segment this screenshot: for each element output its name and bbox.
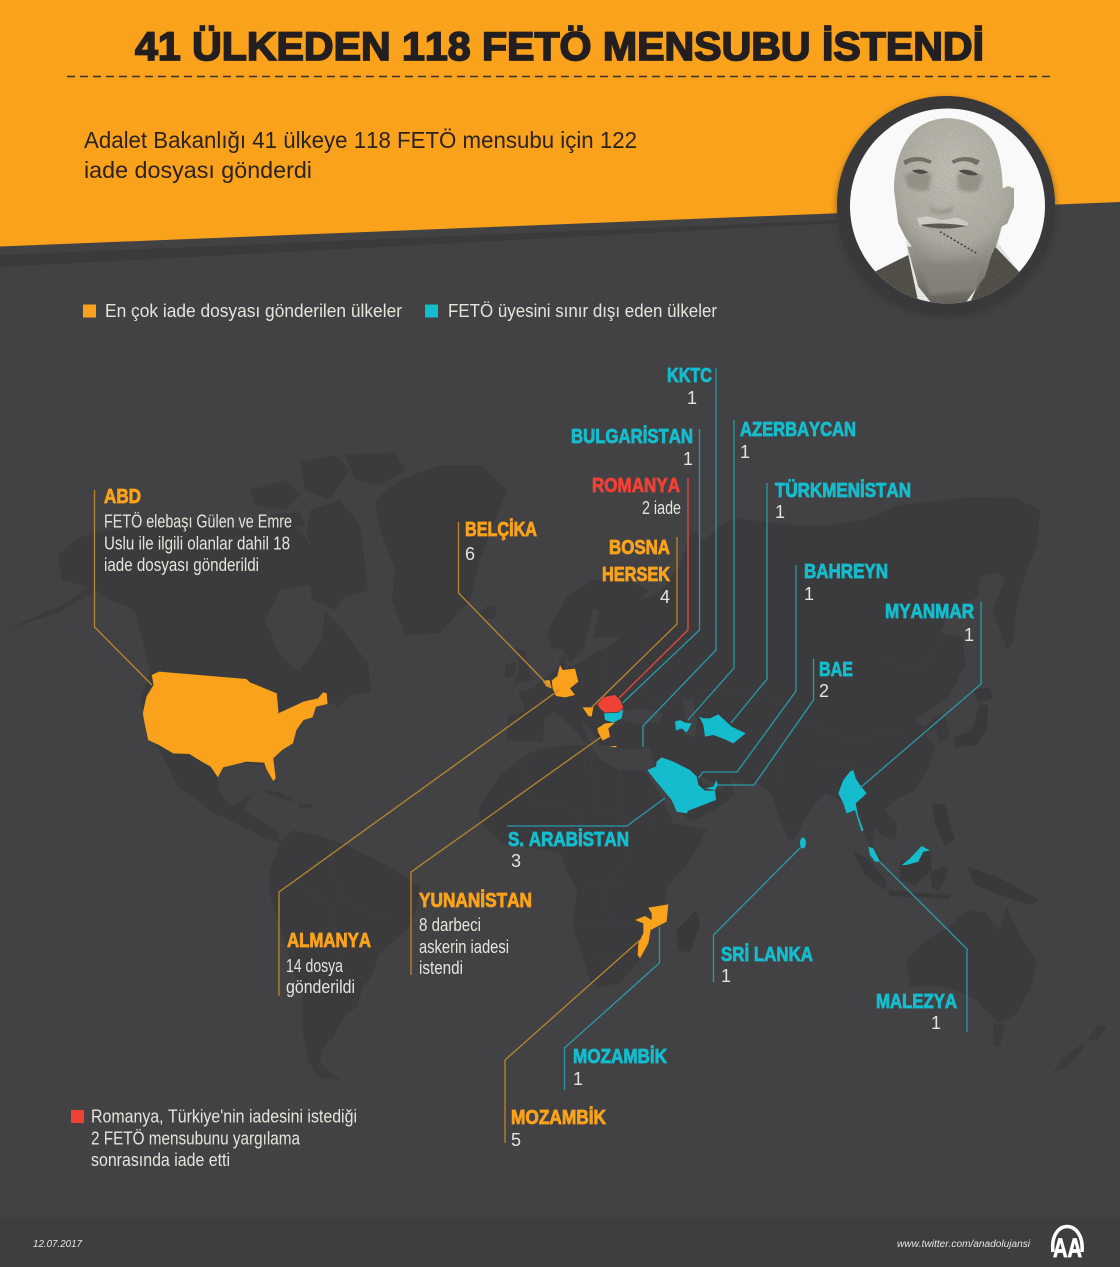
highlighted country: UAE — [705, 780, 718, 790]
body: gönderildi — [286, 977, 355, 997]
value: 6 — [465, 544, 475, 564]
legend swatch: teal — [425, 304, 438, 318]
highlighted country: Saudi Arabia — [647, 757, 716, 813]
callout: Bosna Hersek — [592, 536, 677, 707]
callout: Almanya — [279, 690, 559, 997]
face grain — [876, 118, 1019, 303]
land: eurasia — [507, 497, 1040, 862]
heading: AZERBAYCAN — [740, 418, 856, 441]
subtitle: Adalet Bakanlığı 41 ülkeye 118 FETÖ mensubu için 122 — [84, 127, 637, 153]
portrait backdrop — [850, 108, 1045, 304]
land: iceland and british isles — [480, 605, 532, 684]
value: 2 — [819, 681, 829, 701]
leader line — [731, 483, 767, 723]
note text: 2 FETÖ mensubunu yargılama — [91, 1128, 301, 1148]
land: japan — [953, 687, 993, 748]
leader line — [714, 847, 801, 982]
callout: Myanmar — [860, 600, 981, 788]
body: 14 dosya — [286, 956, 344, 976]
portrait ring — [837, 96, 1055, 314]
highlighted country: Greece — [597, 723, 617, 747]
highlighted country: Turkmenistan — [699, 714, 746, 743]
land: australia — [907, 907, 1037, 1023]
callout: S. Arabistan — [507, 798, 665, 871]
heading: MYANMAR — [885, 600, 974, 623]
footer url: www.twitter.com/anadolujansi — [897, 1239, 1031, 1250]
land: southeast asia islands — [852, 803, 1040, 905]
portrait — [836, 96, 1056, 318]
value: 1 — [721, 966, 731, 986]
land: africa — [479, 745, 707, 988]
note swatch — [71, 1110, 84, 1123]
highlighted country: Romania — [597, 695, 623, 713]
value: 1 — [931, 1013, 941, 1033]
leader line — [688, 420, 734, 720]
body: 8 darbeci — [419, 915, 481, 935]
legend label: orange: En çok iade dosyası gönderilen ülkeler — [105, 301, 402, 321]
note: Romania — [71, 1106, 357, 1170]
value: 5 — [511, 1130, 521, 1150]
leader line — [564, 927, 660, 1090]
callout: Belçika — [458, 518, 550, 687]
value: 1 — [964, 625, 974, 645]
value: 1 — [573, 1069, 583, 1089]
land: north america — [5, 520, 371, 842]
highlighted country: Sri Lanka — [800, 838, 806, 848]
heading: BULGARİSTAN — [571, 425, 693, 448]
heading: MALEZYA — [876, 990, 957, 1013]
callout: Romanya — [592, 474, 688, 698]
portrait shadow — [836, 98, 1056, 318]
value: 4 — [660, 587, 670, 607]
leader line — [643, 368, 716, 747]
world map — [5, 452, 1107, 1080]
subtitle: iade dosyası gönderdi — [84, 157, 312, 183]
callout: Mozambik orange — [505, 940, 640, 1150]
highlighted country: Mozambique — [635, 904, 668, 958]
highlighted country: Myanmar — [838, 770, 867, 832]
leader line — [880, 862, 967, 1032]
heading: MOZAMBİK — [573, 1045, 667, 1068]
heading: ROMANYA — [592, 474, 680, 497]
land: madagascar — [677, 910, 700, 953]
body: Uslu ile ilgili olanlar dahil 18 — [104, 534, 290, 554]
heading: ABD — [104, 485, 141, 508]
AA logo — [1053, 1226, 1082, 1263]
land: south america — [270, 830, 420, 1080]
footer bar — [0, 1218, 1120, 1267]
highlighted country: Belgium — [543, 680, 552, 688]
water: inland seas — [623, 698, 725, 790]
leader line — [622, 429, 700, 703]
leader line — [860, 602, 981, 788]
body: FETÖ elebaşı Gülen ve Emre — [104, 512, 292, 532]
leader line — [411, 737, 601, 975]
land: canadian arctic islands — [250, 452, 405, 597]
heading: S. ARABİSTAN — [508, 828, 629, 851]
land: tasmania and new zealand — [993, 1023, 1107, 1073]
legend swatch: orange — [83, 304, 96, 318]
highlighted country: Azerbaijan — [675, 720, 692, 733]
callout: ABD — [94, 485, 292, 685]
callout: BAE — [717, 658, 853, 785]
portrait face — [875, 118, 1019, 304]
note text: sonrasında iade etti — [91, 1150, 230, 1170]
heading: SRİ LANKA — [721, 943, 813, 966]
highlighted country: Germany — [552, 665, 578, 697]
value: 1 — [804, 584, 814, 604]
title: 41 ÜLKEDEN 118 FETÖ MENSUBU İSTENDİ — [135, 24, 984, 69]
note text: Romanya, Türkiye'nin iadesini istediği — [91, 1106, 357, 1126]
leader line — [94, 490, 152, 685]
callout: Türkmenistan — [731, 479, 911, 723]
orange header band — [0, 0, 1120, 246]
land: greenland — [375, 465, 507, 635]
highlighted country: Bulgaria — [604, 709, 623, 723]
heading: BAE — [819, 658, 853, 681]
value: 1 — [687, 388, 697, 408]
leader line — [592, 537, 677, 707]
body: istendi — [419, 958, 463, 978]
heading: TÜRKMENİSTAN — [775, 479, 911, 502]
callout: Sri Lanka — [714, 847, 813, 986]
callout: Malezya — [876, 862, 967, 1033]
logo arc — [1053, 1226, 1082, 1252]
faint country borders — [290, 640, 945, 990]
footer date: 12.07.2017 — [33, 1239, 82, 1250]
body: askerin iadesi — [419, 937, 509, 957]
callout: Bahreyn — [698, 560, 888, 778]
land: cuba and caribbean — [261, 790, 312, 809]
callout: KKTC — [643, 364, 716, 747]
header shadow wedge — [0, 220, 840, 267]
leader line — [279, 690, 559, 996]
callout: Azerbaycan — [688, 418, 856, 720]
value: 2 iade — [642, 498, 681, 518]
value: 3 — [511, 851, 521, 871]
heading: BELÇİKA — [465, 518, 537, 541]
legend — [83, 301, 717, 321]
legend label: teal: FETÖ üyesini sınır dışı eden ülkeler — [448, 301, 717, 321]
highlighted country: Malaysia — [868, 846, 930, 865]
leader line — [458, 522, 550, 687]
callout: Bulgaristan — [571, 425, 700, 703]
heading: ALMANYA — [287, 929, 371, 952]
leader line — [698, 565, 796, 778]
body: iade dosyası gönderildi — [104, 555, 259, 575]
value: 1 — [683, 449, 693, 469]
leader line — [619, 478, 688, 698]
logo letters: AA — [1053, 1233, 1082, 1263]
value: 1 — [740, 442, 750, 462]
subtitle — [84, 127, 637, 183]
heading: KKTC — [667, 364, 712, 387]
heading line 1: BOSNA — [609, 536, 670, 559]
value: 1 — [775, 502, 785, 522]
leader line — [717, 659, 814, 785]
highlighted country: USA — [143, 672, 327, 781]
dashed title rule — [67, 76, 1053, 78]
leader line — [507, 798, 665, 826]
heading: BAHREYN — [804, 560, 888, 583]
callout: Yunanistan — [411, 737, 601, 978]
callout: Mozambik teal — [564, 927, 667, 1090]
heading line 2: HERSEK — [602, 563, 670, 586]
heading: MOZAMBİK — [511, 1106, 606, 1129]
land: hudson bay water — [265, 590, 322, 672]
heading: YUNANİSTAN — [419, 889, 532, 912]
leader line — [505, 940, 640, 1143]
highlighted country: Bosnia — [583, 707, 593, 717]
